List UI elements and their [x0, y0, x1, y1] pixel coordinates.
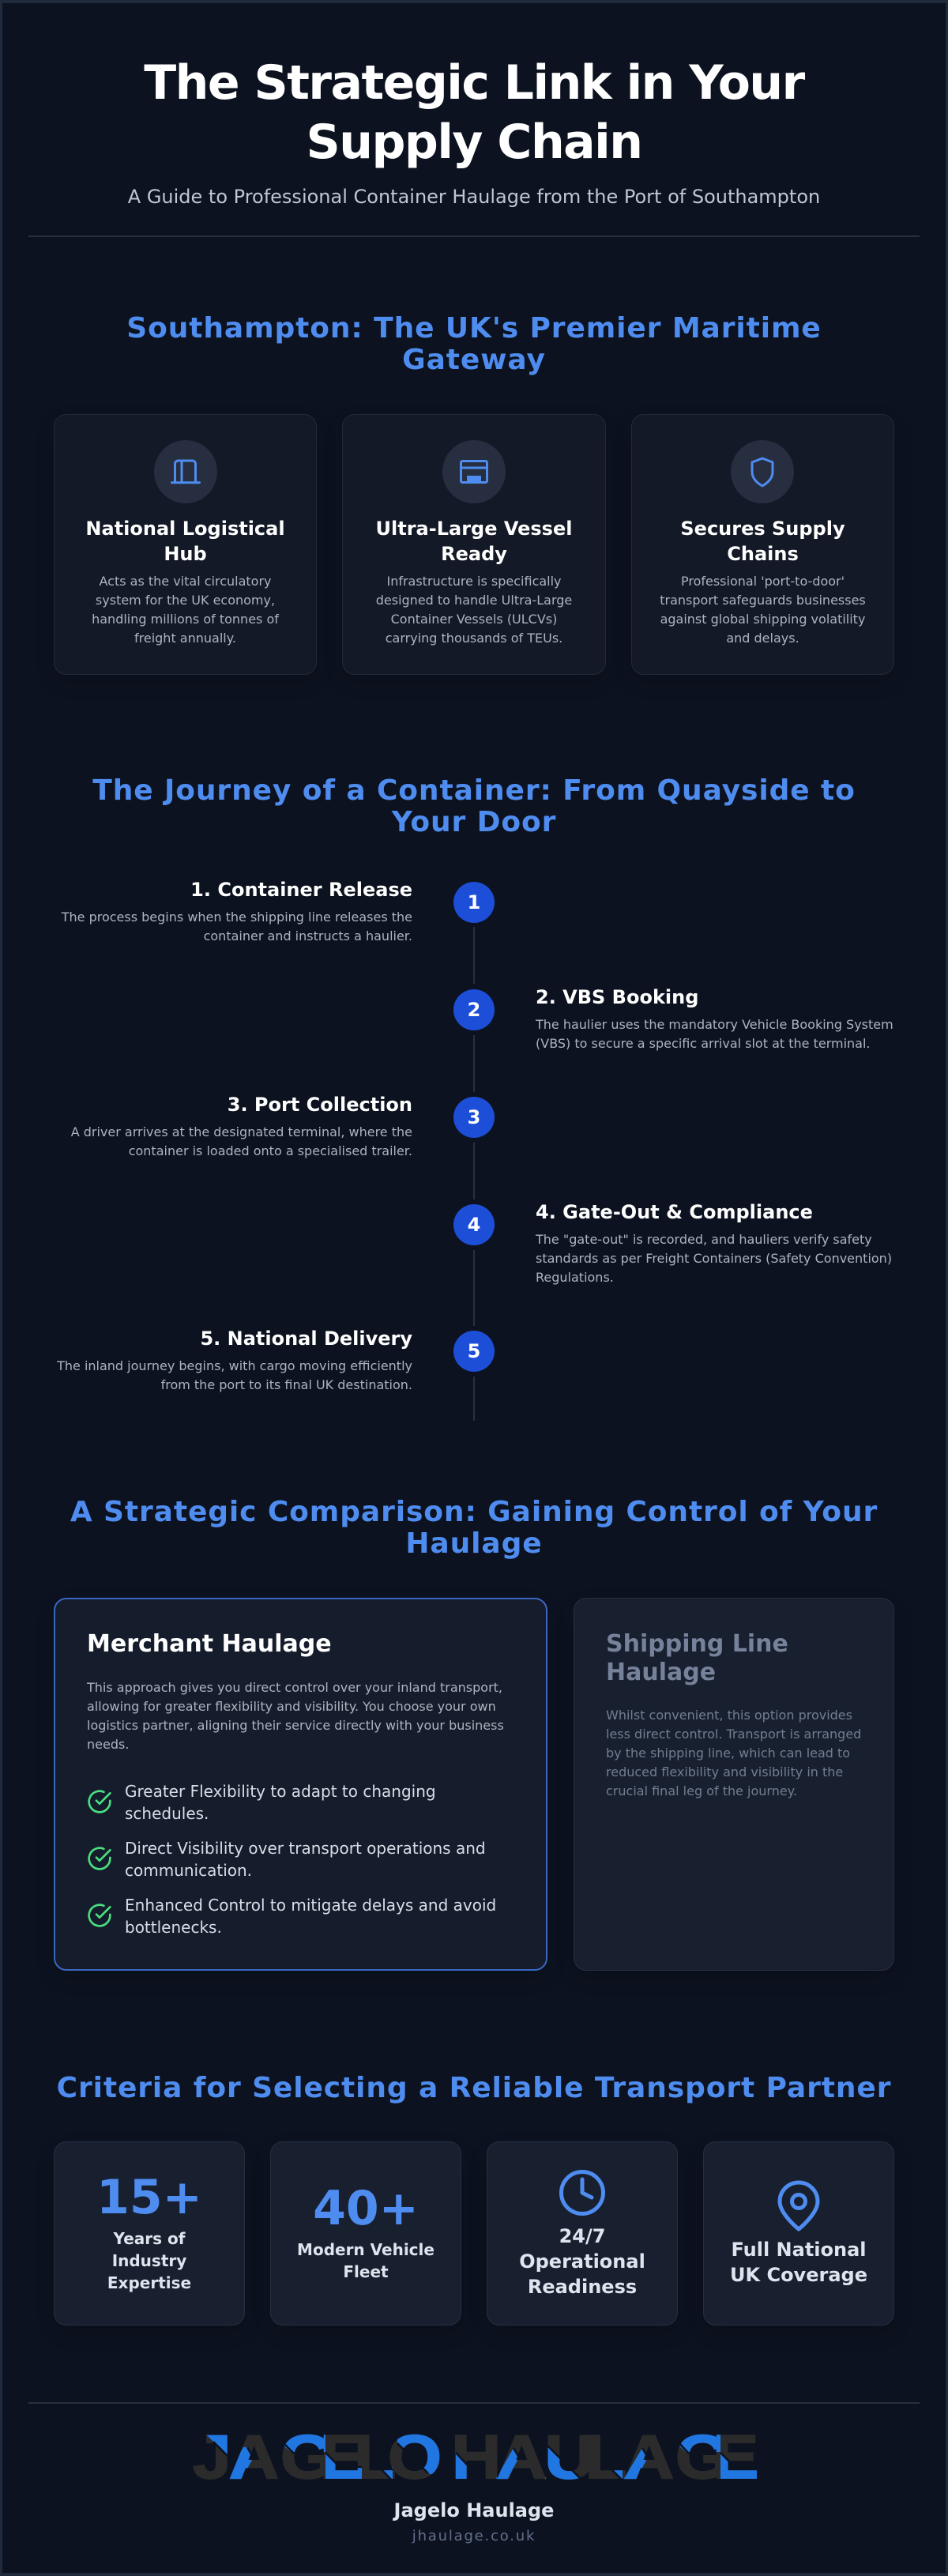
text: Direct Visibility over transport operations and	[125, 1839, 486, 1858]
stat: 15+	[96, 2170, 202, 2225]
panel: 24/7 readiness	[487, 2141, 678, 2326]
label: Industry	[112, 2251, 186, 2270]
step 1 text: container and instructs a haulier.	[204, 928, 412, 943]
heading: Ultra-Large Vessel	[376, 518, 572, 540]
section heading: comparison: Haulage	[405, 1527, 543, 1560]
description	[92, 574, 280, 646]
description	[660, 574, 866, 646]
section heading: Southampton: Southampton: The UK's Premier Maritime	[126, 312, 822, 345]
panel: Ultra-Large Vessel Ready	[342, 414, 606, 675]
label: Expertise	[107, 2273, 191, 2292]
heading	[680, 518, 845, 565]
icon: vessel container	[442, 440, 506, 503]
step 5 marker: 5	[468, 1340, 480, 1362]
description: handling millions of tonnes of	[92, 612, 279, 627]
heading: Ready	[441, 543, 507, 565]
step 4 text: Regulations.	[536, 1270, 614, 1285]
step 5 text	[57, 1328, 412, 1392]
description: by the shipping line, which can lead to	[606, 1746, 850, 1761]
heading	[85, 518, 285, 565]
step 1 marker	[453, 882, 495, 923]
step 3 text	[71, 1094, 412, 1158]
label: Years of	[114, 2229, 185, 2248]
heading: Hub	[164, 543, 207, 565]
step 5 marker	[453, 1331, 495, 1372]
step 5 text: The inland journey begins, with cargo moving efficiently	[57, 1358, 412, 1373]
step 3 text: container is loaded onto a specialised trailer.	[129, 1143, 412, 1158]
icon: check	[88, 1847, 111, 1870]
description: less direct control. Transport is arranged	[606, 1727, 861, 1742]
logo: Jagelo Haulage wordmark: JAGELO HAULAGE	[193, 2422, 758, 2491]
icon: map pin	[777, 2181, 820, 2231]
label	[730, 2239, 867, 2286]
step 3 marker	[453, 1097, 495, 1138]
icon: hub	[154, 440, 217, 503]
footer company name: Jagelo Haulage	[394, 2499, 554, 2521]
step 3 text: 3. Port Collection	[228, 1094, 412, 1116]
description: freight annually.	[134, 631, 236, 646]
description: allowing for greater flexibility and visibility. You choose your own	[87, 1699, 496, 1714]
section heading: journey: Your Door	[392, 806, 556, 838]
step 2 marker	[453, 989, 495, 1030]
text: Enhanced Control to mitigate delays and avoid	[125, 1896, 496, 1915]
heading: Merchant Haulage	[87, 1630, 332, 1658]
label: Readiness	[528, 2276, 637, 2298]
heading	[606, 1630, 788, 1686]
stat: 40+	[313, 2181, 419, 2236]
step 1 text: 1. Container Release	[190, 879, 412, 901]
text: Greater Flexibility to adapt to changing	[125, 1782, 436, 1801]
icon: clock	[559, 2170, 605, 2216]
description	[376, 574, 572, 646]
description: Container Vessels (ULCVs)	[391, 612, 557, 627]
subtitle: A Guide to Professional Container Haulage from the Port of Southampton	[128, 186, 820, 208]
description	[87, 1680, 504, 1752]
label: Modern Vehicle	[297, 2240, 434, 2259]
step 1 text: The process begins when the shipping line releases the	[62, 910, 412, 925]
title: Supply Chain	[307, 115, 641, 170]
section heading: journey	[92, 774, 856, 838]
section heading: Southampton: Gateway	[402, 344, 546, 376]
step 3 marker: 3	[468, 1106, 480, 1128]
step 4 marker	[453, 1204, 495, 1245]
description: and delays.	[726, 631, 799, 646]
step 5 text: from the port to its final UK destination.	[161, 1377, 412, 1392]
section heading: comparison	[70, 1496, 878, 1560]
heading: Haulage	[606, 1659, 716, 1686]
label	[519, 2225, 645, 2298]
icon: check	[88, 1904, 111, 1927]
text	[125, 1839, 486, 1880]
text: schedules.	[125, 1804, 209, 1823]
description: logistics partner, aligning their service directly with your business	[87, 1718, 504, 1733]
step 2 text	[536, 986, 893, 1051]
footer website: jhaulage.co.uk	[412, 2528, 536, 2544]
panel: 15+ years	[54, 2141, 245, 2326]
panel: coverage	[703, 2141, 894, 2326]
step 4 marker: 4	[468, 1214, 480, 1236]
section heading: criteria: Criteria for Selecting a Reliable Transport Partner	[57, 2072, 891, 2104]
description: This approach gives you direct control over your inland transport,	[87, 1680, 502, 1695]
step 4 text: standards as per Freight Containers (Safety Convention)	[536, 1251, 892, 1266]
label	[107, 2229, 191, 2292]
logo: Jagelo Haulage wordmark: JAGELO HAULAGE	[193, 2422, 758, 2491]
benefit 1	[88, 1782, 436, 1823]
label: UK Coverage	[730, 2264, 867, 2286]
title: The Strategic Link in Your	[144, 55, 804, 111]
description: crucial final leg of the journey.	[606, 1783, 797, 1798]
text	[125, 1782, 436, 1823]
label: 24/7	[559, 2225, 605, 2247]
label: Fleet	[343, 2262, 389, 2281]
description	[606, 1708, 861, 1798]
label	[297, 2240, 434, 2281]
heading: Chains	[727, 543, 799, 565]
panel: Merchant Haulage	[54, 1598, 547, 1971]
text: communication.	[125, 1861, 252, 1880]
description: designed to handle Ultra-Large	[376, 593, 572, 608]
step 2 marker: 2	[468, 999, 480, 1021]
step 1 marker: 1	[468, 891, 480, 913]
description: Whilst convenient, this option provides	[606, 1708, 852, 1723]
panel: 40+ fleet	[270, 2141, 461, 2326]
section heading: Southampton	[126, 312, 822, 376]
description: transport safeguards businesses	[660, 593, 866, 608]
step 4 text	[536, 1201, 892, 1285]
step 4 text: 4. Gate-Out & Compliance	[536, 1201, 813, 1223]
step 2 text: The haulier uses the mandatory Vehicle Booking System	[536, 1017, 893, 1032]
heading: National Logistical	[85, 518, 285, 540]
description: reduced flexibility and visibility in the	[606, 1764, 843, 1779]
heading	[376, 518, 572, 565]
heading: Shipping Line	[606, 1630, 788, 1658]
section heading: journey: The Journey of a Container: From Quayside to	[92, 774, 856, 807]
description: needs.	[87, 1737, 129, 1752]
icon: check	[88, 1790, 111, 1813]
benefit 2	[88, 1839, 486, 1880]
description: carrying thousands of TEUs.	[386, 631, 562, 646]
step 2 text: 2. VBS Booking	[536, 986, 698, 1008]
panel: Shipping Line Haulage	[574, 1598, 894, 1971]
description: Professional 'port-to-door'	[681, 574, 845, 589]
icon: shield	[731, 440, 794, 503]
panel: Secures Supply Chains	[631, 414, 894, 675]
label: Operational	[519, 2250, 645, 2273]
step 3 text: A driver arrives at the designated terminal, where the	[71, 1124, 412, 1139]
step 1 text	[62, 879, 412, 943]
text: bottlenecks.	[125, 1918, 222, 1937]
description: system for the UK economy,	[96, 593, 275, 608]
heading: Secures Supply	[680, 518, 845, 540]
label: Full National	[731, 2239, 867, 2261]
section heading: comparison: A Strategic Comparison: Gaining Control of Your	[70, 1496, 878, 1528]
description: Acts as the vital circulatory	[99, 574, 272, 589]
description: against global shipping volatility	[660, 612, 865, 627]
title	[144, 55, 806, 170]
benefit 3	[88, 1896, 496, 1937]
description: Infrastructure is specifically	[386, 574, 562, 589]
step 4 text: The "gate-out" is recorded, and hauliers verify safety	[536, 1232, 872, 1247]
text	[125, 1896, 496, 1937]
step 2 text: (VBS) to secure a specific arrival slot at the terminal.	[536, 1036, 871, 1051]
panel: National Logistical Hub	[54, 414, 317, 675]
step 5 text: 5. National Delivery	[200, 1328, 412, 1350]
